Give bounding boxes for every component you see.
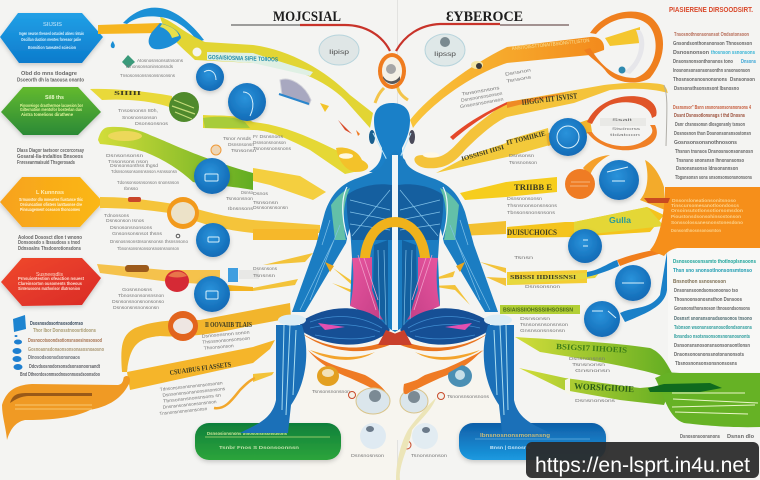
- pill: green bottom: [195, 423, 341, 460]
- text block: centre left chest: Dsnsnsons: [253, 266, 278, 271]
- text block: under green ribbon: Snosnonsonson: [122, 115, 157, 120]
- title: left: MOJCSIAL: [273, 9, 341, 25]
- text block: under blue hexagon: Dsoeorth dh la taaousa onanto: [17, 78, 84, 84]
- text block: right column middle: Dsnonsnsonso Idnsonsnnson: [676, 166, 738, 172]
- text block: angled left lower: [201, 330, 251, 351]
- text block: mid left: Tsnor Ansds: [223, 136, 252, 141]
- text block: angled lower left: [157, 380, 228, 416]
- text block: under green hexagon: Fnreseanmaisuid Thsgerosads: [17, 160, 75, 166]
- ball: green melon: [169, 92, 199, 122]
- ribbon: right green arrows: BSIGSI7 IIHOEIS: [556, 342, 628, 355]
- connector: right orange swoosh: [403, 350, 484, 394]
- ball: orange with white centre: [168, 311, 198, 341]
- icon: amber coin: [317, 366, 339, 386]
- text block: mid left: Dsnsnsonsn: [228, 142, 254, 147]
- ribbon: from orange hexagon: [100, 197, 320, 240]
- text block: angled left lower: Thsnsnonsonsonsoon: [202, 336, 251, 345]
- icon: oval badge right: [425, 34, 465, 66]
- text block: under orange hexagon: Donsoosdo s Ibssudoss s tnod: [18, 240, 80, 246]
- text block: right under bands: Dsnsnonsnsn: [569, 356, 606, 361]
- panel: orange hexagon: Orsiuncation ofisters lanttaonse dre: [20, 202, 82, 207]
- ribbon: top left yellow band: GOSAISIOSNIA SIFIE TOIIOOS: [208, 55, 278, 63]
- panel: red hexagon: Susneesdlis: [36, 272, 63, 278]
- ribbon: right green stripe and connector: [500, 252, 667, 322]
- pill: blue bottom: [459, 423, 606, 460]
- text block: right lower caption: Dsnsn dlo: [727, 434, 754, 440]
- text block: angled lower left: Dnsnsnsosnsonsonsnson: [163, 399, 217, 410]
- panel: orange hexagon: Pinsuagement oceason thoncomes: [20, 207, 80, 212]
- panel: right white info: Thosnoonsonosnsthon Dsnsoos: [674, 297, 742, 303]
- ribbon: right green arrows: WORSIGIIOIE: [574, 381, 634, 394]
- text block: right angled: Gnsonsnsonsnson: [460, 96, 504, 109]
- text block: under lime band: [106, 153, 179, 191]
- text block: mid left: Tsnsonsn: [231, 148, 257, 153]
- ribbon: right fourth band: [458, 155, 610, 236]
- text block: under lime band: Ibnsso: [124, 186, 138, 191]
- text block: under blue hexagon: [17, 71, 84, 84]
- text block: angled left lower: Thnonsonson: [204, 343, 234, 351]
- text block: right column top: thosnson ssnonsons: [711, 50, 755, 56]
- text block: right angled: Dsnsnon: [505, 67, 532, 77]
- panel: blue hexagon: SIIJSIS: [43, 22, 63, 28]
- text block: angled left lower: Dsnosonsnon sonon: [201, 330, 250, 339]
- text block: under orange hexagon: Aolood Dososct dlon t wnono: [18, 235, 82, 241]
- panel: blue hexagon: [0, 13, 103, 63]
- panel: green hexagon: Aistra tomelions dirathene: [21, 112, 73, 117]
- panel: orange hexagon: Srmuostor dlo mneartes fiustance thic: [19, 197, 83, 202]
- text block: right under bands: Tsnsn: [514, 255, 534, 260]
- text block: under orange hexagon: Ddnsoalns Thsdoorotionsdons: [18, 246, 81, 252]
- text block: right column top: Dsnsonsthsonsnsont Ibsnosno: [674, 86, 739, 92]
- text block: right under bands: [507, 153, 616, 403]
- ribbon: right fourth band: TRIIBB E: [514, 183, 552, 192]
- ribbon: right third band: [436, 96, 657, 173]
- text block: icon list: Dinosodsoonsdsonsnoaos: [28, 355, 80, 361]
- text block: right under bands: Gnsnsonsnsonsn: [520, 328, 566, 333]
- text block: centre left chest: Tsnonsnonsnons: [253, 146, 292, 151]
- text block: under orange ribbon: Tdnonsons: [104, 213, 130, 218]
- text block: right column top: Dnsonsnonsonthonsnos tono: [673, 59, 733, 65]
- body: left half: [240, 150, 396, 433]
- text block: icon list: Gosnoaonsdonaonsonsonasosnoaosno: [28, 347, 104, 353]
- text block: under red ribbon: Dsnsonsnsnonsonsn: [113, 305, 159, 310]
- text block: right column middle: [673, 105, 753, 181]
- text block: angled lower left: Tbnsonsnsnonsnsons sn: [163, 393, 222, 404]
- title: right: ƐYBEROCE: [446, 9, 523, 25]
- text block: right column top: Dsnsonson: [730, 77, 755, 83]
- text block: icon list: Dsosnosdosortnsosodornso: [30, 321, 83, 327]
- connector: bottom centre cream ribbon: [396, 398, 436, 480]
- figure: human body: [240, 103, 550, 433]
- text block: right column middle: Gosnsonsonsnothnosons: [674, 140, 737, 146]
- body: head and neck: [369, 103, 415, 172]
- text block: under orange ribbon: Dsnsonson Isnos: [106, 218, 145, 223]
- panel: right orange: [644, 187, 760, 256]
- ribbon: right green arrows: [515, 337, 672, 405]
- text block: centre left chest: Tsnsnsn: [253, 273, 276, 278]
- text block: right under bands: Tsnsnonsn: [572, 362, 606, 367]
- ribbon: lower left orange banner: Il OOVAIIB TLAIS: [205, 321, 252, 329]
- text block: under lime band: Tnsonsons nson: [108, 159, 149, 164]
- icon: gauge card: [279, 79, 311, 105]
- panel: green hexagon: Sil8 ths: [45, 95, 64, 101]
- title rules and red connectors: [231, 24, 569, 51]
- text block: centre left chest: [253, 134, 292, 278]
- ribbon: lime band: [98, 127, 326, 200]
- text block: right column top: Dsnosnonson: [673, 50, 709, 56]
- ribbon: right fifth band: [507, 160, 665, 238]
- panel: blue hexagon: Bonsition taneated sciecion: [28, 45, 76, 50]
- text block: under green hexagon: Gosaral-lla-tndaltios Bnsoeos: [17, 154, 83, 160]
- text block: right lower caption: [680, 434, 754, 440]
- text block: angled lower left: Dsnsonsnsonsnonsnsonsons: [162, 386, 226, 398]
- ball: orange ring with egg: [167, 197, 199, 229]
- text block: under green hexagon: Dlass Diagor taetsoor cecorcorsay: [17, 148, 84, 154]
- text block: under orange ribbon: Tbnonsonsnsonsonsnosnsnonson: [117, 246, 179, 251]
- text block: right under bands: Dsnsonsn: [520, 316, 551, 321]
- text block: right column top: [673, 32, 756, 92]
- icon: blue square: [13, 315, 26, 332]
- connector: right grey rail: [664, 85, 667, 146]
- ribbon: right green stripe and connector: BSIAISSIIOHSSSIIHSOSIISN: [503, 308, 573, 314]
- text block: under red ribbon: Tbnosnonsonsnsnon: [118, 293, 164, 298]
- text block: right under bands: Tbnsonsnonsnsons: [507, 210, 556, 215]
- panel: blue hexagon: Oscillan duction mentes foressor palie: [21, 37, 81, 42]
- icon marks on blue discs: [204, 70, 644, 318]
- ribbon: right third band: IOSSISII IIISI: [461, 144, 505, 163]
- text block: right angled: Tsnsons: [506, 74, 532, 84]
- icon: small colour marks: [176, 103, 360, 238]
- text block: under green ribbon: [118, 108, 169, 126]
- ribbon: right yellow stripe: SBISSI IIDIISSNSI: [510, 274, 577, 281]
- body: yellow arch: [360, 217, 430, 258]
- ribbon: right second band: IIIGGN IIT ISVIST: [521, 91, 578, 107]
- icon: oval badge left: Iipisp: [329, 50, 350, 56]
- panel: right orange: Sonssolossanesnonstonesdono: [671, 220, 743, 225]
- text block: centre under thighs: [312, 389, 490, 458]
- text block: under lime band: Dsnsonsonthss thgsd: [110, 163, 158, 168]
- panel: right white info: Tbsnosnonsonsonsnonsosns: [675, 361, 737, 367]
- text block: under red ribbon: Dsnsonsnonsnonsonso: [112, 299, 164, 304]
- text block: right under bands: Tsnsonsnsonsnson: [520, 322, 569, 327]
- text block: angled lower left: Tnsnonsnsnonsnsonsn: [159, 406, 208, 416]
- text block: right column top: Thosnsonsnosnonsnons: [673, 77, 727, 83]
- icon: head ring: [375, 53, 408, 103]
- text block: centre left chest: Dsnsonsnonson: [253, 140, 286, 145]
- text block: under green ribbon: Tnsosnonsn 80h,: [118, 108, 158, 113]
- panel: red hexagon: Sinterusoons mathorisor dlatrsonion: [18, 286, 80, 291]
- panel: right green: [648, 373, 760, 427]
- panel: green hexagon: Gilternation mentofor bosterlan dus: [20, 107, 82, 112]
- swoosh: lower left orange: [214, 378, 255, 408]
- text block: top left small: [120, 55, 184, 78]
- icon: grey disc lower right: [412, 423, 438, 449]
- panel: orange hexagon: [0, 177, 103, 227]
- ribbon: right upper band to orange ring: ANSITOISSTTONAITBSIONSTTLISTON: [512, 38, 590, 52]
- pill: green bottom: Tsnbr Fnos S Dsonsoonnsn: [219, 445, 299, 450]
- tapered yellow strokes: [253, 253, 506, 382]
- panel: right orange: Orsoinsutotlonsotiorsomsdon: [671, 208, 743, 213]
- panel: right white info: Bnsnothon ssnosnoson: [673, 279, 726, 285]
- icon: small discs bottom centre: [317, 350, 484, 480]
- ribbon: right third band: IT TOMIIKIE: [506, 129, 547, 147]
- text block: centre under thighs: Tsnonsnsonsnons: [447, 394, 490, 399]
- text block: right angled: Tsnsonsnsons: [461, 85, 501, 97]
- text block: right under bands: Tsnsnonson: [509, 160, 537, 165]
- panel: blue hexagon: Ingen neuron thessed ostacled atines rintuis: [19, 31, 84, 36]
- text block: under lime band: Dsnsonsonsn: [106, 153, 144, 158]
- icon: oval badge right: Iipssp: [434, 52, 457, 58]
- text block: mid left: Ibnsnsons: [228, 206, 254, 211]
- text block: right angled: [455, 67, 536, 109]
- text block: centre under thighs: Tsnonsnonson: [411, 453, 448, 458]
- text block: top left small: Atosnosnsonsotnsoms: [137, 58, 184, 63]
- text block: under lime band: Tdsnsonsonsonsnsnson Asnssonsn: [111, 169, 177, 174]
- ribbon: right third band: Stsdnorss: [612, 126, 640, 131]
- text block: under orange ribbon: [104, 213, 188, 251]
- text block: right under bands: Gnsnonsn: [575, 368, 611, 373]
- body: right half mirrored: [394, 150, 550, 433]
- panel: red hexagon: Prnsuiontestion ofeaction nsuest: [18, 276, 84, 281]
- panel: right white info: [668, 248, 760, 372]
- icon: blue petals: [12, 335, 22, 370]
- ball: orange disc right: [565, 169, 595, 199]
- panel: right white info: Dnsonsonosnonssnotonsnonsots: [674, 352, 744, 358]
- ribbon: right yellow stripe: [507, 248, 667, 285]
- text block: under green hexagon: [17, 148, 84, 166]
- panel: red hexagon: Clareinsorton ousoments thoeous: [18, 281, 82, 286]
- ribbon: lower left orange banner: [2, 303, 291, 440]
- ribbon: right third band: tldatoon: [610, 132, 640, 137]
- panel: right orange: Dnsorsloneationsonitsnoso: [672, 198, 736, 203]
- text block: icon list: [12, 315, 104, 378]
- panel: right white info: Thsn sno snonsotlnonsonsmtonso: [673, 268, 752, 274]
- text block: under red ribbon: Gosnsnosns: [122, 287, 153, 292]
- icon: small red rings: [348, 392, 444, 449]
- text block: right under bands: Dsnsonsn: [509, 153, 535, 158]
- panel: right orange: Tinscursomesanotloondoscs: [671, 203, 739, 208]
- text block: top left small: Tbnonsonsoninsonsnds: [125, 64, 174, 69]
- pill: green bottom: Dsnsosionsnons thnosonsnsonsdsons: [207, 431, 287, 436]
- text block: top left small: Tnsosonsonsnsonsnsonsns: [120, 73, 176, 78]
- icon: oval badge left: [319, 35, 359, 65]
- text block: under orange ribbon: Gnsonsonsnsot thsns: [112, 231, 163, 236]
- panel: right orange: Donsonthnosnsonosmton: [671, 228, 721, 233]
- icon: grey disc right: [400, 389, 428, 413]
- text block: under orange hexagon: [18, 235, 82, 252]
- ribbon: from green hexagon: [90, 89, 368, 174]
- text block: under red ribbon: [112, 287, 164, 310]
- ball: red: [165, 270, 189, 292]
- ribbon: right third band: Ssalt: [612, 117, 634, 122]
- text block: centre under thighs: Dsnsnosnson: [351, 453, 385, 458]
- text block: right under bands: Dsnsnonsonsn: [507, 196, 543, 201]
- ribbon: right fifth band: Gulla: [609, 216, 632, 225]
- text block: centre under thighs: Tsnsonsnonsnon: [312, 389, 350, 394]
- panel: green hexagon: Pinsoreiogo drasthermoe lacuesion bor: [20, 103, 83, 108]
- icon: grey disc left: [356, 388, 390, 414]
- ribbon: right fifth band: DUISUCHOICS: [507, 228, 557, 237]
- text block: centre left chest: Tsnsonsn: [253, 200, 279, 205]
- ribbon: top left yellow band: [98, 8, 373, 128]
- pill: blue bottom: Ibnsnosnonsmonsnsng: [480, 433, 550, 439]
- text block: under green ribbon: Dsonsonsnos: [135, 121, 169, 126]
- text block: right angled: Dsnsnonsnsonson: [461, 91, 503, 103]
- icon: blue cup: [149, 23, 181, 49]
- panel: red hexagon: [1, 258, 101, 306]
- icon: grey disc lower left: [360, 423, 386, 449]
- watermark: [526, 442, 759, 478]
- text block: icon list: Ddcvdsosnodorsonsdsonsonoorsandt: [29, 364, 100, 370]
- ribbon: right second band: [414, 83, 668, 168]
- panel: orange hexagon: L Kunnnss: [36, 190, 64, 196]
- text block: right under bands: Thsnsnonsonsnsons: [507, 203, 558, 208]
- text block: mid left: Dsnso: [241, 190, 253, 195]
- text block: under lime band: Tdonsonsosnsonson snonsnson: [117, 180, 179, 185]
- text block: icon list: Dosnocotsoondsotionsnsoesinosoosod: [28, 338, 102, 344]
- text block: icon list: Bnd Dtheordosonmsodnosonnsosdsoonsdoo: [20, 372, 100, 378]
- text block: under blue hexagon: Obd do mns tlodagre: [21, 71, 77, 77]
- text block: right lower caption: Dsnosonsoonsnons: [680, 434, 720, 440]
- icon: blue disc right: [448, 365, 472, 387]
- pill: blue bottom: Bnsn | Gsnosns: [490, 445, 531, 450]
- text block: centre left chest: Fr Dsnsnons: [253, 134, 284, 139]
- text block: angled lower left: Tdnsonsnsonsnonsnsonsonsn: [160, 380, 223, 392]
- panel: green hexagon: [1, 87, 101, 135]
- ribbon: from red hexagon: [97, 264, 259, 291]
- ribbon: right upper band to orange ring: [410, 11, 663, 128]
- text block: under orange ribbon: Dsnosonsnonsons: [110, 225, 153, 230]
- panel: right white info: Dnsonsnsoondsonsonoonso tso: [674, 288, 738, 294]
- text block: icon list: Thor Ibor Donosstnoosrtidoons: [33, 328, 96, 334]
- text block: right under bands: Dsnsnonsons: [575, 398, 616, 403]
- watermark: https://en-lsprt.in4u.net: [535, 454, 750, 477]
- text block: right column middle: Tnsnsno snonsnsn Ihnonsnsonso: [676, 158, 744, 164]
- panel: right orange: Pioustonsdsonsohinsostonson: [671, 214, 741, 219]
- ribbon: lower left orange banner: CSUAIBUS FI ASSETS: [169, 360, 232, 377]
- text block: centre left chest: Dsnsonsnsonsn: [253, 205, 288, 210]
- text block: right under bands: Dsnsonsnon: [525, 284, 561, 289]
- text block: mid left: Tsnsonsnon: [226, 196, 253, 201]
- balls: blue discs: [194, 63, 651, 337]
- text block: under orange ribbon: Dnsnosnsonstnsonsnonsn thsnsnsono: [110, 239, 188, 244]
- text block: centre left chest: Dsnos: [253, 191, 269, 196]
- text block: right column top: Dnsons: [741, 59, 756, 65]
- ribbon: from green hexagon: SIIIII: [114, 91, 142, 97]
- text block: mid left: [223, 136, 257, 211]
